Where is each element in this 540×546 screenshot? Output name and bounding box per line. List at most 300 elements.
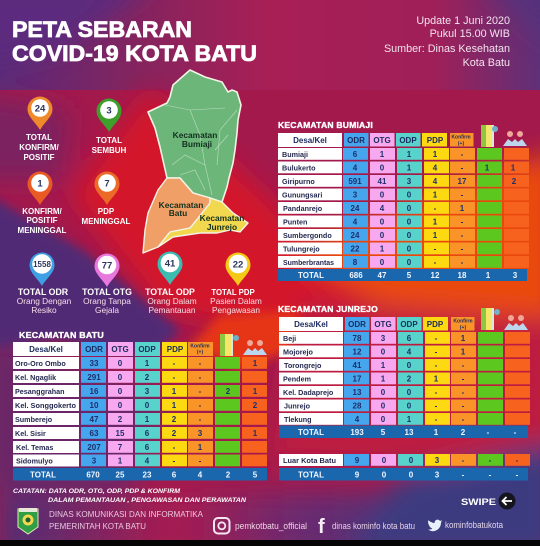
table rows: 7 [118,443,123,452]
table rows: 2 [226,387,231,396]
table header: PDP [427,320,444,329]
table rows: 2 [118,415,123,424]
agency name: PEMERINTAH KOTA BATU [49,522,146,531]
table rows: 24 [351,204,360,213]
table rows: 0 [407,244,412,254]
stat: total pdp [210,252,262,315]
table rows: 8 [353,258,358,267]
table header: OTG [374,320,392,329]
table header [278,133,474,147]
stat: total pdp: 22 [233,260,243,270]
map region: Batu [143,178,210,253]
total row: TOTAL [298,428,324,437]
title: PETA SEBARAN [12,17,192,42]
table rows: - [199,359,202,368]
update info: Pukul 15.00 WIB [430,28,510,40]
total row: 18 [458,271,467,280]
total row: 5 [407,271,412,280]
table rows: 47 [90,415,99,424]
table rows: Pendem [283,374,311,384]
table rows: 16 [90,387,99,396]
table rows: 3 [407,177,412,186]
table rows: Kel. Sisir [15,429,46,438]
table rows: 1 [253,387,258,396]
table rows: 13 [353,388,362,397]
social: instagram: pemkotbatu_official [235,521,307,531]
icon: isolation room [481,308,500,330]
table rows: 0 [380,218,385,226]
table rows: - [199,387,202,396]
table header: (+) [460,325,466,331]
row: Luar Kota Batu: Luar Kota Batu [283,456,336,465]
table rows: 4 [380,204,385,213]
stat: total konfirm positif: 24 [35,104,46,114]
table rows: 2 [172,429,177,438]
table rows: Kel. Dadaprejo [283,388,334,397]
table rows: 2 [172,415,177,424]
table rows: 41 [353,361,362,370]
table rows: 1 [145,415,150,424]
update info: Update 1 Juni 2020 [416,15,510,27]
row: Luar Kota Batu: 0 [409,456,414,465]
stat: total otg: Gejala [95,305,119,315]
table header: Konfirm [190,344,210,350]
total row: - [514,428,517,437]
table rows: 3 [381,334,386,343]
table rows: 10 [90,401,99,410]
table rows: 1 [433,190,438,200]
table header: ODP [400,320,418,329]
table header: OTG [111,345,129,354]
map region: Batu: Kecamatan [159,200,203,210]
row: Luar Kota Batu: 9 [355,456,360,465]
row: Luar Kota Batu: - [516,456,519,465]
total row [279,468,528,480]
table rows: 22 [351,244,360,254]
catatan note: DALAM PEMANTAUAN , PENGAWASAN DAN PERAWATAN [48,497,247,504]
table rows: Mojorejo [283,348,314,356]
table rows: - [199,415,202,424]
table rows: - [173,359,176,368]
table rows: Bumiaji [282,150,308,159]
total row: - [489,470,492,480]
social: instagram [214,518,307,534]
table rows: - [461,150,464,159]
table header: Konfirm [453,318,473,324]
stat: total odp [145,251,197,315]
table rows: Kel. Songgokerto [15,401,77,410]
table rows: 17 [353,374,362,384]
total row: - [487,428,490,437]
stat: total odr: 1558 [33,260,51,269]
total row: 686 [349,271,363,280]
table header: OTG [373,136,391,145]
table rows: 63 [90,429,99,438]
table rows: 1 [172,401,177,410]
table rows: Tulungrejo [283,244,320,254]
table rows: 0 [381,348,386,356]
total row: TOTAL [298,470,324,480]
table rows: 0 [407,218,412,226]
table rows: Tlekung [284,415,312,424]
table header [13,342,213,356]
table header: Desa/Kel [29,345,63,354]
table header: Desa/Kel [293,136,327,145]
stat: total odr: Resiko [31,305,57,315]
table rows: 1 [433,231,438,240]
table rows: 4 [407,348,412,356]
table rows: 1 [461,348,466,356]
icon: isolation room [220,334,239,356]
table header [279,317,474,331]
table rows [13,357,267,466]
table rows: Punten [283,218,307,226]
table rows: 0 [380,164,385,172]
table rows: 12 [353,348,362,356]
stat: pdp meninggal [82,171,131,226]
table rows: 0 [407,231,412,240]
stat: total sembuh: TOTAL [96,136,122,145]
table rows: Sumbergondo [283,231,332,240]
table rows: Junrejo [284,402,311,410]
stat: total otg: TOTAL OTG [82,287,132,297]
table rows: Gunungsari [282,190,322,200]
table rows: - [461,164,464,172]
table rows: 1 [407,150,412,159]
row: Luar Kota Batu [279,454,530,466]
stat: total pdp: Pasien Dalam [210,296,262,306]
total row: 0 [382,470,387,480]
stat: konfirm positif meninggal: MENINGGAL [18,226,67,235]
panel: Kecamatan Bumiaji table [278,121,529,281]
stat: total konfirm positif [19,96,60,162]
stat: total odp: 41 [165,258,176,270]
table rows: - [435,334,438,343]
stat: total sembuh: SEMBUH [92,146,127,155]
stat: total pdp: Pengawasan [212,305,260,315]
row: Luar Kota Batu: - [489,456,492,465]
stat: total sembuh [92,98,127,155]
table rows: Beji [283,334,296,343]
table rows: 4 [353,218,358,226]
stat: konfirm positif meninggal: POSITIF [26,216,58,225]
table rows: 0 [407,361,412,370]
table header: (+) [197,350,203,356]
table rows: - [461,244,464,254]
table rows: 6 [353,150,358,159]
total row: 12 [431,271,440,280]
table rows: 1 [433,218,438,226]
catatan note [13,488,247,504]
total row: 5 [381,428,386,437]
total row [13,468,267,480]
stat: total otg [82,253,132,315]
heading: Kecamatan Bumiaji: KECAMATAN BUMIAJI [278,121,373,130]
table header: Desa/Kel [294,320,328,329]
table rows: 4 [355,415,360,424]
table rows: Sumberejo [15,415,53,424]
stat: konfirm positif meninggal: 1 [37,178,43,190]
panel: Kecamatan Batu table [13,331,267,480]
total row: TOTAL [298,271,324,280]
table rows: 3 [145,387,150,396]
table rows: 2 [407,374,412,384]
table rows: - [462,374,465,384]
table rows: 4 [433,164,438,172]
row: Luar Kota Batu: 3 [435,456,440,465]
table rows: - [434,258,437,267]
table rows: 3 [92,456,97,466]
table rows: - [435,415,438,424]
table rows: 1 [118,456,123,466]
table rows: - [462,388,465,397]
table rows: 41 [378,177,387,186]
table rows: - [435,402,438,410]
table rows [279,332,530,425]
total row: 9 [355,470,360,480]
table rows: 1 [381,361,386,370]
table header: ODR [348,320,366,329]
total row: 1 [486,271,491,280]
table rows: 17 [458,177,467,186]
total row: 1 [434,428,439,437]
table rows: 0 [407,258,412,267]
total row: 2 [461,428,466,437]
map region: Batu: Batu [169,208,187,218]
table rows: 6 [145,429,150,438]
table rows: - [461,258,464,267]
icon: hospital patients [503,131,527,146]
table rows: 1 [253,359,258,368]
table rows: 28 [353,402,362,410]
social: twitter: kominfobatukota [445,520,503,530]
update info [384,15,510,69]
table rows: 1 [511,164,516,172]
table rows: Pandanrejo [283,204,323,213]
table rows: - [435,388,438,397]
total row: 670 [86,470,100,480]
table rows: 15 [116,429,125,438]
total row: - [462,470,465,480]
table rows: 2 [512,177,517,186]
total row [278,269,527,281]
stat: konfirm positif meninggal [18,171,67,235]
table rows: 1 [460,204,465,213]
table rows: Kel. Temas [16,443,53,452]
map region: Bumiaji: Kecamatan [173,130,217,140]
stat: total sembuh: 3 [106,106,112,116]
table rows: 0 [118,373,123,382]
table header: ODP [138,345,156,354]
total row: 193 [350,428,364,437]
table rows: - [173,443,176,452]
icon: isolation room [481,125,498,147]
map region: Junrejo: Kecamatan [200,213,244,223]
icon: hospital patients [504,315,528,330]
total row: 47 [378,271,387,280]
table rows: 1 [253,429,258,438]
stat: total otg: 77 [102,260,112,272]
table rows: - [462,402,465,410]
map region: Bumiaji: Bumiaji [182,139,212,149]
social: facebook [318,516,415,538]
total row: 6 [172,470,177,480]
table rows: 2 [253,401,258,410]
map region: Junrejo: Junrejo [207,222,237,232]
table header: Konfirm [451,134,471,140]
stat: total odp: Pemantauan [148,305,196,315]
table rows: 0 [145,401,150,410]
catatan note: CATATAN: DATA ODR, OTG, ODP, PDP & KONFIRM [13,488,180,495]
total row: 3 [513,271,518,280]
stat: total odr: TOTAL ODR [18,287,69,297]
table header: ODP [399,136,417,145]
table rows: 78 [353,334,362,343]
agency name [49,510,204,531]
social: facebook: dinas kominfo kota batu [332,521,415,531]
stat: total konfirm positif: TOTAL [26,133,52,142]
table rows: 1 [485,164,490,172]
total row: 13 [405,428,414,437]
table rows: 0 [380,190,385,200]
table header: (+) [458,141,464,147]
stat: pdp meninggal: MENINGGAL [82,217,131,226]
table rows: 1 [407,164,412,172]
table rows: 0 [118,401,123,410]
panel: Luar Kota Batu table [279,454,530,480]
stat: total odp: Orang Dalam [147,296,197,306]
table rows: Sidomulyo [16,456,53,466]
table rows: 1 [381,374,386,384]
title [12,17,257,66]
table rows: Torongrejo [284,361,322,370]
table rows: - [435,348,438,356]
table rows: 3 [198,429,203,438]
total row: 23 [143,470,152,480]
agency name: DINAS KOMUNIKASI DAN INFORMATIKA [49,510,204,519]
stat: total odp: TOTAL ODP [145,287,195,297]
table rows: 1 [172,387,177,396]
table rows: - [461,190,464,200]
table rows: Bulukerto [282,164,316,172]
swipe indicator [461,492,516,510]
table rows: 0 [407,388,412,397]
table header: ODR [347,136,365,145]
table header: ODR [85,345,103,354]
map region: Junrejo [158,198,248,247]
table rows: 0 [407,204,412,213]
social: facebook: f [318,516,325,538]
table rows: 2 [145,373,150,382]
total row [279,426,528,438]
table header: PDP [427,136,444,145]
row: Luar Kota Batu: 0 [382,456,387,465]
table rows: 24 [351,231,360,240]
table rows: Pesanggrahan [15,387,65,396]
table rows: 0 [380,258,385,267]
table rows: 4 [145,456,150,466]
total row: 0 [409,470,414,480]
table rows: 0 [381,415,386,424]
table rows: Giripurno [282,177,315,186]
table header: PDP [167,345,184,354]
table rows: 0 [381,402,386,410]
panel: Kecamatan Junrejo table [278,305,530,438]
table rows: 1 [433,150,438,159]
table rows: 33 [90,359,99,368]
table rows: 1 [434,374,439,384]
update info: Sumber: Dinas Kesehatan [384,43,510,55]
table rows: - [434,244,437,254]
stat: total konfirm positif: KONFIRM/ [19,143,60,152]
total row: 25 [116,470,125,480]
table rows: - [173,373,176,382]
stat: konfirm positif meninggal: KONFIRM/ [22,207,63,216]
stat: total odr: Orang Dengan [17,296,72,306]
total row: 4 [198,470,203,480]
table rows: 1 [380,150,385,159]
total row: 2 [226,470,231,480]
table rows: - [461,218,464,226]
swipe indicator: SWIPE [461,497,496,508]
table rows: - [434,204,437,213]
update info: Kota Batu [463,57,510,69]
heading: Kecamatan Junrejo: KECAMATAN JUNREJO [278,305,378,314]
table rows: - [435,361,438,370]
title: COVID-19 KOTA BATU [12,41,257,66]
table rows: 1 [380,244,385,254]
table rows: - [199,401,202,410]
table rows: - [173,456,176,466]
map region: Bumiaji [148,70,241,202]
table rows: 3 [353,190,358,200]
table rows [278,148,529,268]
stat: total odr [17,252,72,315]
total row: - [516,470,519,480]
stat: pdp meninggal: 7 [104,178,110,190]
table rows: 1 [407,415,412,424]
table rows: 0 [407,190,412,200]
stat: total konfirm positif: POSITIF [23,153,55,162]
total row: 3 [435,470,440,480]
icon: hospital patients [243,340,267,355]
row: Luar Kota Batu: - [462,456,465,465]
table rows: Oro-Oro Ombo [15,359,66,368]
map of Kota Batu [143,70,248,253]
table rows: 6 [407,334,412,343]
table rows: 207 [87,443,101,452]
table rows: 291 [87,373,101,382]
table rows: 4 [433,177,438,186]
table rows: - [199,373,202,382]
table rows: Sumberbrantas [283,258,334,267]
total row: TOTAL [30,470,56,480]
table rows: Kel. Ngaglik [15,373,56,382]
table rows: 6 [145,443,150,452]
heading: Kecamatan Batu: KECAMATAN BATU [19,331,104,340]
logo: Pemerintah Kota Batu [18,508,38,534]
table rows: 1 [145,359,150,368]
table rows: 0 [407,402,412,410]
table rows: - [462,361,465,370]
table rows: 0 [381,388,386,397]
social: twitter [428,520,503,531]
table rows: 1 [461,334,466,343]
table rows: - [461,231,464,240]
table rows: 0 [118,387,123,396]
stat: pdp meninggal: PDP [98,207,115,216]
table rows: 591 [348,177,362,186]
